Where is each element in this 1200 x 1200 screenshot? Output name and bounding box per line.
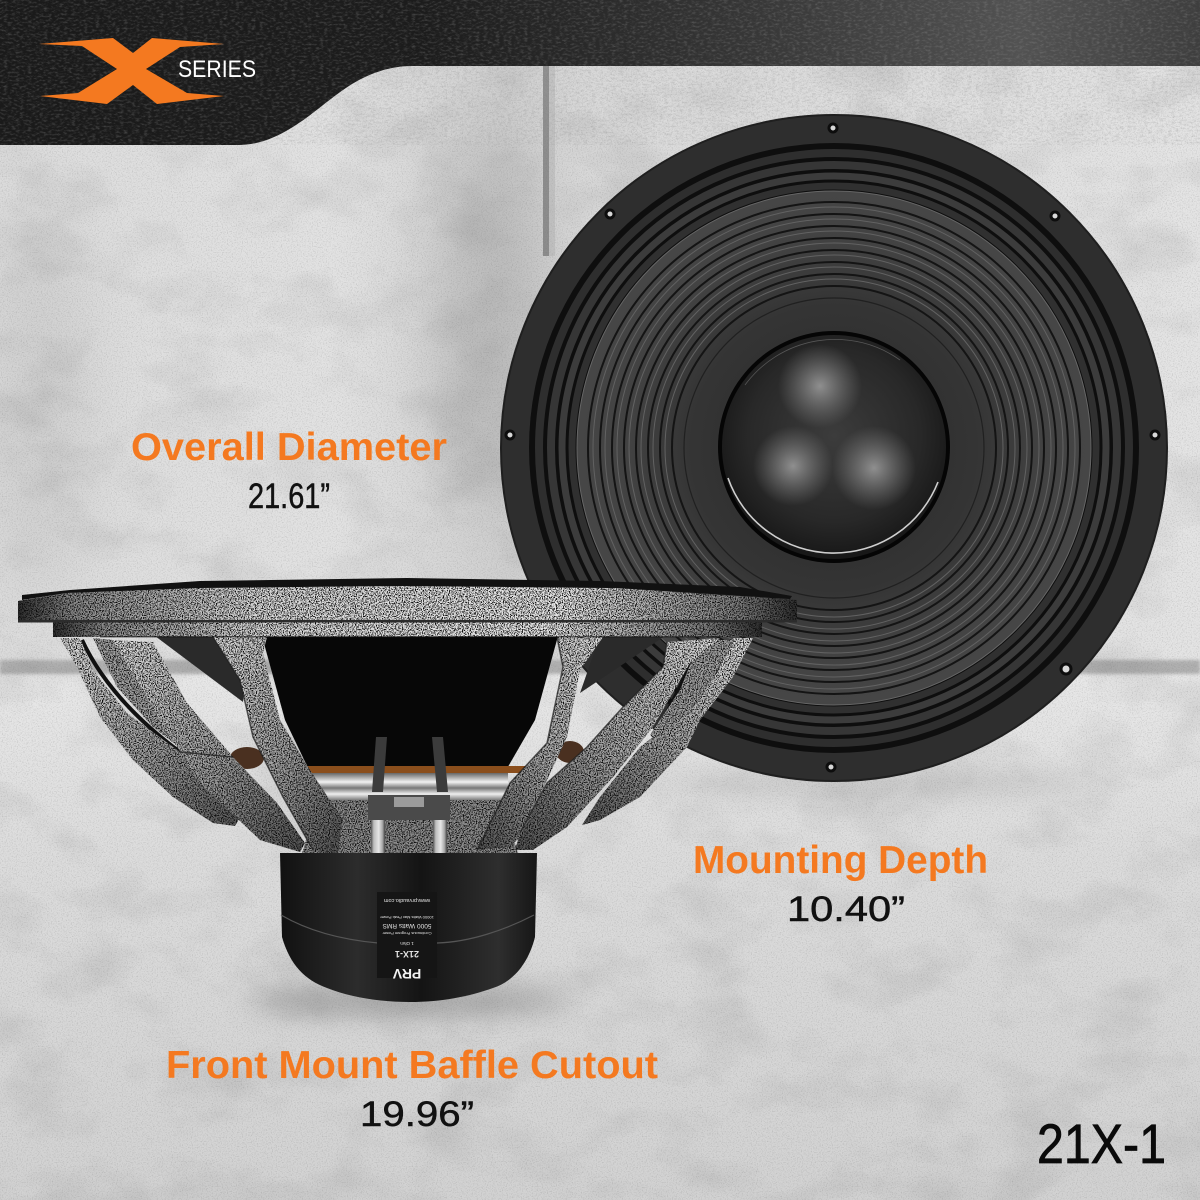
left thin spoke [93,638,200,752]
hammered basket spokes and flange [18,586,797,860]
model number: 21X-1 [1037,1112,1166,1175]
right middle spoke [515,638,720,850]
dark cone rear [155,636,665,772]
lower flange [53,622,762,637]
spec: overall diameter [131,426,447,516]
front view speaker [501,115,1167,781]
product label (upside down): www.prvaudio.com [384,897,431,903]
right inner spoke [477,637,603,850]
floor shadow beneath front speaker [650,773,1110,791]
basket frame [501,115,1167,781]
heading: Mounting Depth [693,839,988,882]
upper flange [18,586,797,620]
value: 21.61” [248,477,330,516]
right outer spoke [582,638,753,825]
spoke separators [180,637,667,850]
logo word SERIES: SERIES [178,56,256,83]
paper cone with corrugations [577,191,1091,705]
motor magnet [280,853,537,1002]
left outer spoke [60,638,250,826]
mounting holes [506,124,1159,771]
spec: mounting depth [693,839,988,929]
top dark textured band [0,0,1200,145]
product label (upside down): 1 Ohm [400,941,414,946]
product label (upside down): 5000 Watts RMS [382,922,431,929]
flange edge line and dark top gasket [18,578,797,638]
product label (upside down): 21X-1 [395,949,419,959]
side view speaker [18,578,797,1002]
product label (upside down): Continuous Program Power [382,931,432,936]
left inner spoke [213,637,343,857]
icon: orange X [39,38,224,104]
dark gaps between thin spokes [82,640,732,752]
value: 19.96” [360,1095,474,1134]
orange spider ring and chrome voice coil [290,766,530,803]
motor shadow on floor [245,988,575,1012]
dust cap dome [718,331,950,563]
heading: Front Mount Baffle Cutout [166,1044,658,1087]
logo: X Series [39,38,256,104]
product label (upside down): 10000 Watts Max Peak Power [380,915,434,920]
product label (upside down) [377,892,437,982]
centre hub [300,800,520,860]
right thin spoke [650,640,735,745]
spec: front mount baffle cutout [166,1044,658,1134]
terminals and lead wires [368,737,450,860]
heading: Overall Diameter [131,426,447,469]
rubber surround [529,143,1139,753]
left middle spoke [113,640,305,852]
value: 10.40” [787,890,905,929]
product label (upside down): PRV [392,966,421,982]
